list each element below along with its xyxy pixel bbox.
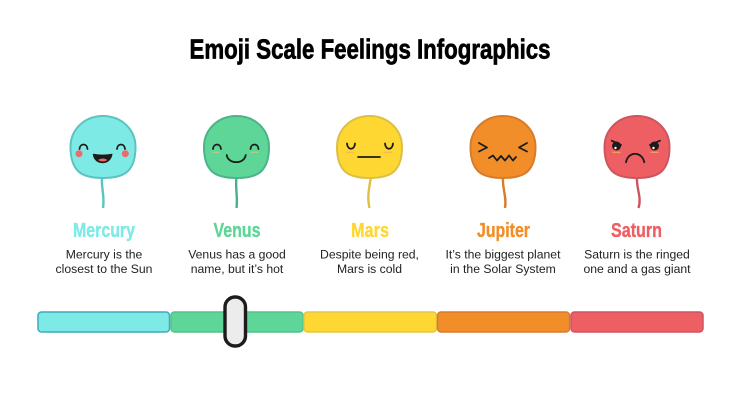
description: Venus: Venus has a good: [188, 248, 286, 262]
segment: yellow: [304, 312, 436, 332]
icon: squinting orange balloon face: [470, 116, 536, 208]
description: Venus: name, but it’s hot: [191, 262, 284, 276]
description: Mercury: Mercury is the: [66, 248, 142, 262]
name: Jupiter: Jupiter: [477, 220, 530, 242]
icon: smiling green balloon face: [204, 116, 269, 208]
description: Jupiter: It’s the biggest planet: [446, 248, 561, 262]
name: Mercury: Mercury: [73, 220, 136, 242]
segment: cyan: [38, 312, 170, 332]
scale bar: [38, 297, 703, 346]
column: Saturn: [583, 116, 691, 276]
description: Saturn: Saturn is the ringed: [584, 248, 690, 262]
icon: happy cyan balloon face: [70, 116, 136, 208]
description: Jupiter: in the Solar System: [450, 262, 556, 276]
column: Venus: [188, 116, 286, 276]
slider handle: [225, 297, 246, 346]
segment: red: [571, 312, 703, 332]
segment: green: [171, 312, 303, 332]
icon: neutral yellow balloon face: [337, 116, 402, 208]
name: Mars: Mars: [351, 220, 389, 242]
column: Mars: [320, 116, 419, 276]
name: Saturn: Saturn: [611, 220, 662, 242]
icon: angry red balloon face: [604, 116, 670, 208]
name: Venus: Venus: [214, 220, 260, 242]
column: Jupiter: [446, 116, 561, 276]
description: Mars: Mars is cold: [337, 262, 402, 276]
column: Mercury: [56, 116, 152, 276]
title: Emoji Scale Feelings Infographics: [190, 34, 550, 64]
description: Mercury: closest to the Sun: [56, 262, 152, 276]
description: Saturn: one and a gas giant: [583, 262, 691, 276]
description: Mars: Despite being red,: [320, 248, 419, 262]
segment: orange: [438, 312, 570, 332]
